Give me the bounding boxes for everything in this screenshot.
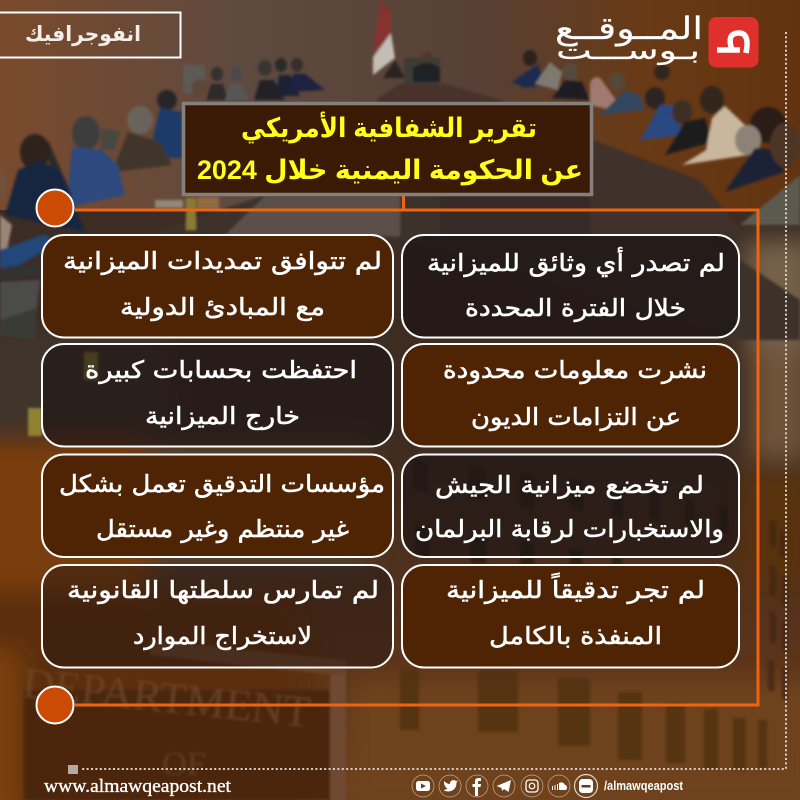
card: army budget oversight: لم تخضع ميزانية الجيش [435,471,704,499]
card: off-budget accounts: خارج الميزانية [145,402,300,430]
logo wordmark [555,11,703,65]
card: budget extensions [42,235,393,338]
left bottles [84,352,98,380]
icon: soundcloud [548,775,570,797]
card: army budget oversight: والاستخبارات لرقابة البرلمان [415,515,724,543]
bottom circle marker [36,686,74,724]
card: resource extraction: لاستخراج الموارد [133,622,312,650]
orange content frame [75,195,758,705]
logo wordmark: بـوســـت [556,36,700,65]
website url: www.almawqeapost.net [44,777,232,797]
card: off-budget accounts [42,344,393,446]
card: debt obligations: نشرت معلومات محدودة [443,356,707,384]
card: full audit [402,565,739,668]
icon: twitter [439,775,461,797]
card: full audit: المنفذة بالكامل [489,622,662,650]
card: debt obligations [402,344,739,446]
social handle: /almawqeapost [604,779,684,793]
icon: facebook [466,775,488,797]
background photo collage: OF [162,746,206,783]
card: budget extensions: لم تتوافق تمديدات الميزانية [63,247,382,275]
table and floor [130,100,800,340]
lower building windows [400,670,767,770]
logo [555,11,758,68]
card: debt obligations: عن التزامات الديون [471,403,681,431]
icon: youtube [412,775,434,797]
upper building windows [413,459,728,578]
card: audit institutions: غير منتظم وغير مستقل [96,515,349,543]
title box: عن الحكومة اليمنية خلال 2024 [197,155,583,186]
card: budget extensions: مع المبادئ الدولية [120,293,325,321]
tag: infographic [0,12,180,58]
flag [373,0,391,55]
card: no budget documents: لم تصدر أي وثائق للميزانية [427,247,725,277]
card: army budget oversight [402,454,739,557]
card: no budget documents [402,235,739,338]
state department building [24,690,330,800]
social icons [412,774,598,798]
card: audit institutions [42,454,393,557]
right people [523,50,537,66]
icon: telegram [493,775,515,797]
card: resource extraction [42,565,393,668]
tag: infographic: انفوجرافيك [25,22,141,46]
title box: تقرير الشفافية الأمريكي [241,111,537,144]
left row of people [183,65,205,93]
card: full audit: لم تجر تدقيقاً للميزانية [446,573,705,604]
icon: instagram [521,775,543,797]
Department lettering: DEPARTMENT [20,658,313,737]
title box [184,104,592,194]
dotted frame end square [68,765,78,774]
icon: logo mark [708,17,758,68]
logo wordmark: المــوقــع [555,11,703,47]
card: audit institutions: مؤسسات التدقيق تعمل بشكل [59,470,385,498]
card: off-budget accounts: احتفظت بحسابات كبيرة [85,356,357,384]
icon: almawqea app [574,774,598,798]
top circle marker [36,190,74,226]
president seat [404,58,440,84]
card: resource extraction: لم تمارس سلطتها القانونية [67,576,379,604]
card: no budget documents: خلال الفترة المحددة [465,294,686,322]
